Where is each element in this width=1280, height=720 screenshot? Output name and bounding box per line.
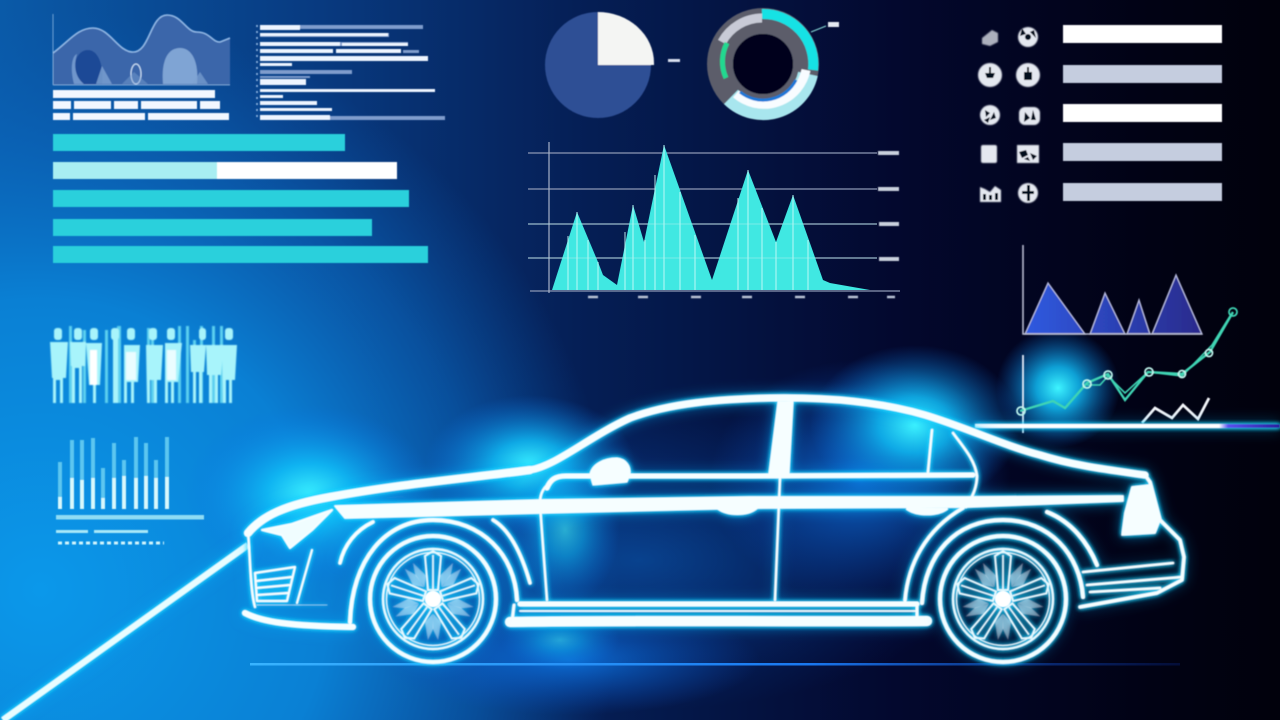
table bars under area chart [53,90,229,120]
car outline [245,398,1184,627]
sill [520,602,917,606]
vertical bar chart [56,437,204,543]
line chart with markers [1017,308,1237,433]
main peak chart [528,142,900,297]
roof line [530,398,1145,475]
horizon light line [975,424,1280,428]
window sill line [547,475,973,488]
door cuts [540,478,780,600]
horizontal list chart [257,25,445,120]
rear arches [922,520,1083,603]
door handles [717,508,947,514]
B pillar [769,402,793,473]
rear quarter window [928,430,977,507]
area chart top left [53,14,230,85]
mirror [590,458,630,485]
small triangle chart [1023,245,1202,334]
light beam [3,545,248,720]
ground line [250,663,1180,666]
headlight [262,510,332,548]
front bumper and grille [248,533,255,607]
cyan progress bars [53,134,428,263]
donut gauge [720,14,839,110]
icon grid and legend bars [978,25,1222,203]
belt line [335,496,1123,518]
front arches [350,520,517,622]
icon column [978,27,1040,203]
trunk and tail [1080,475,1184,607]
pie chart [545,12,680,118]
hood line [248,470,530,533]
front wheel [370,536,496,662]
rear wheel [940,536,1066,662]
people pictogram row [50,326,237,403]
tail light [1122,485,1160,535]
